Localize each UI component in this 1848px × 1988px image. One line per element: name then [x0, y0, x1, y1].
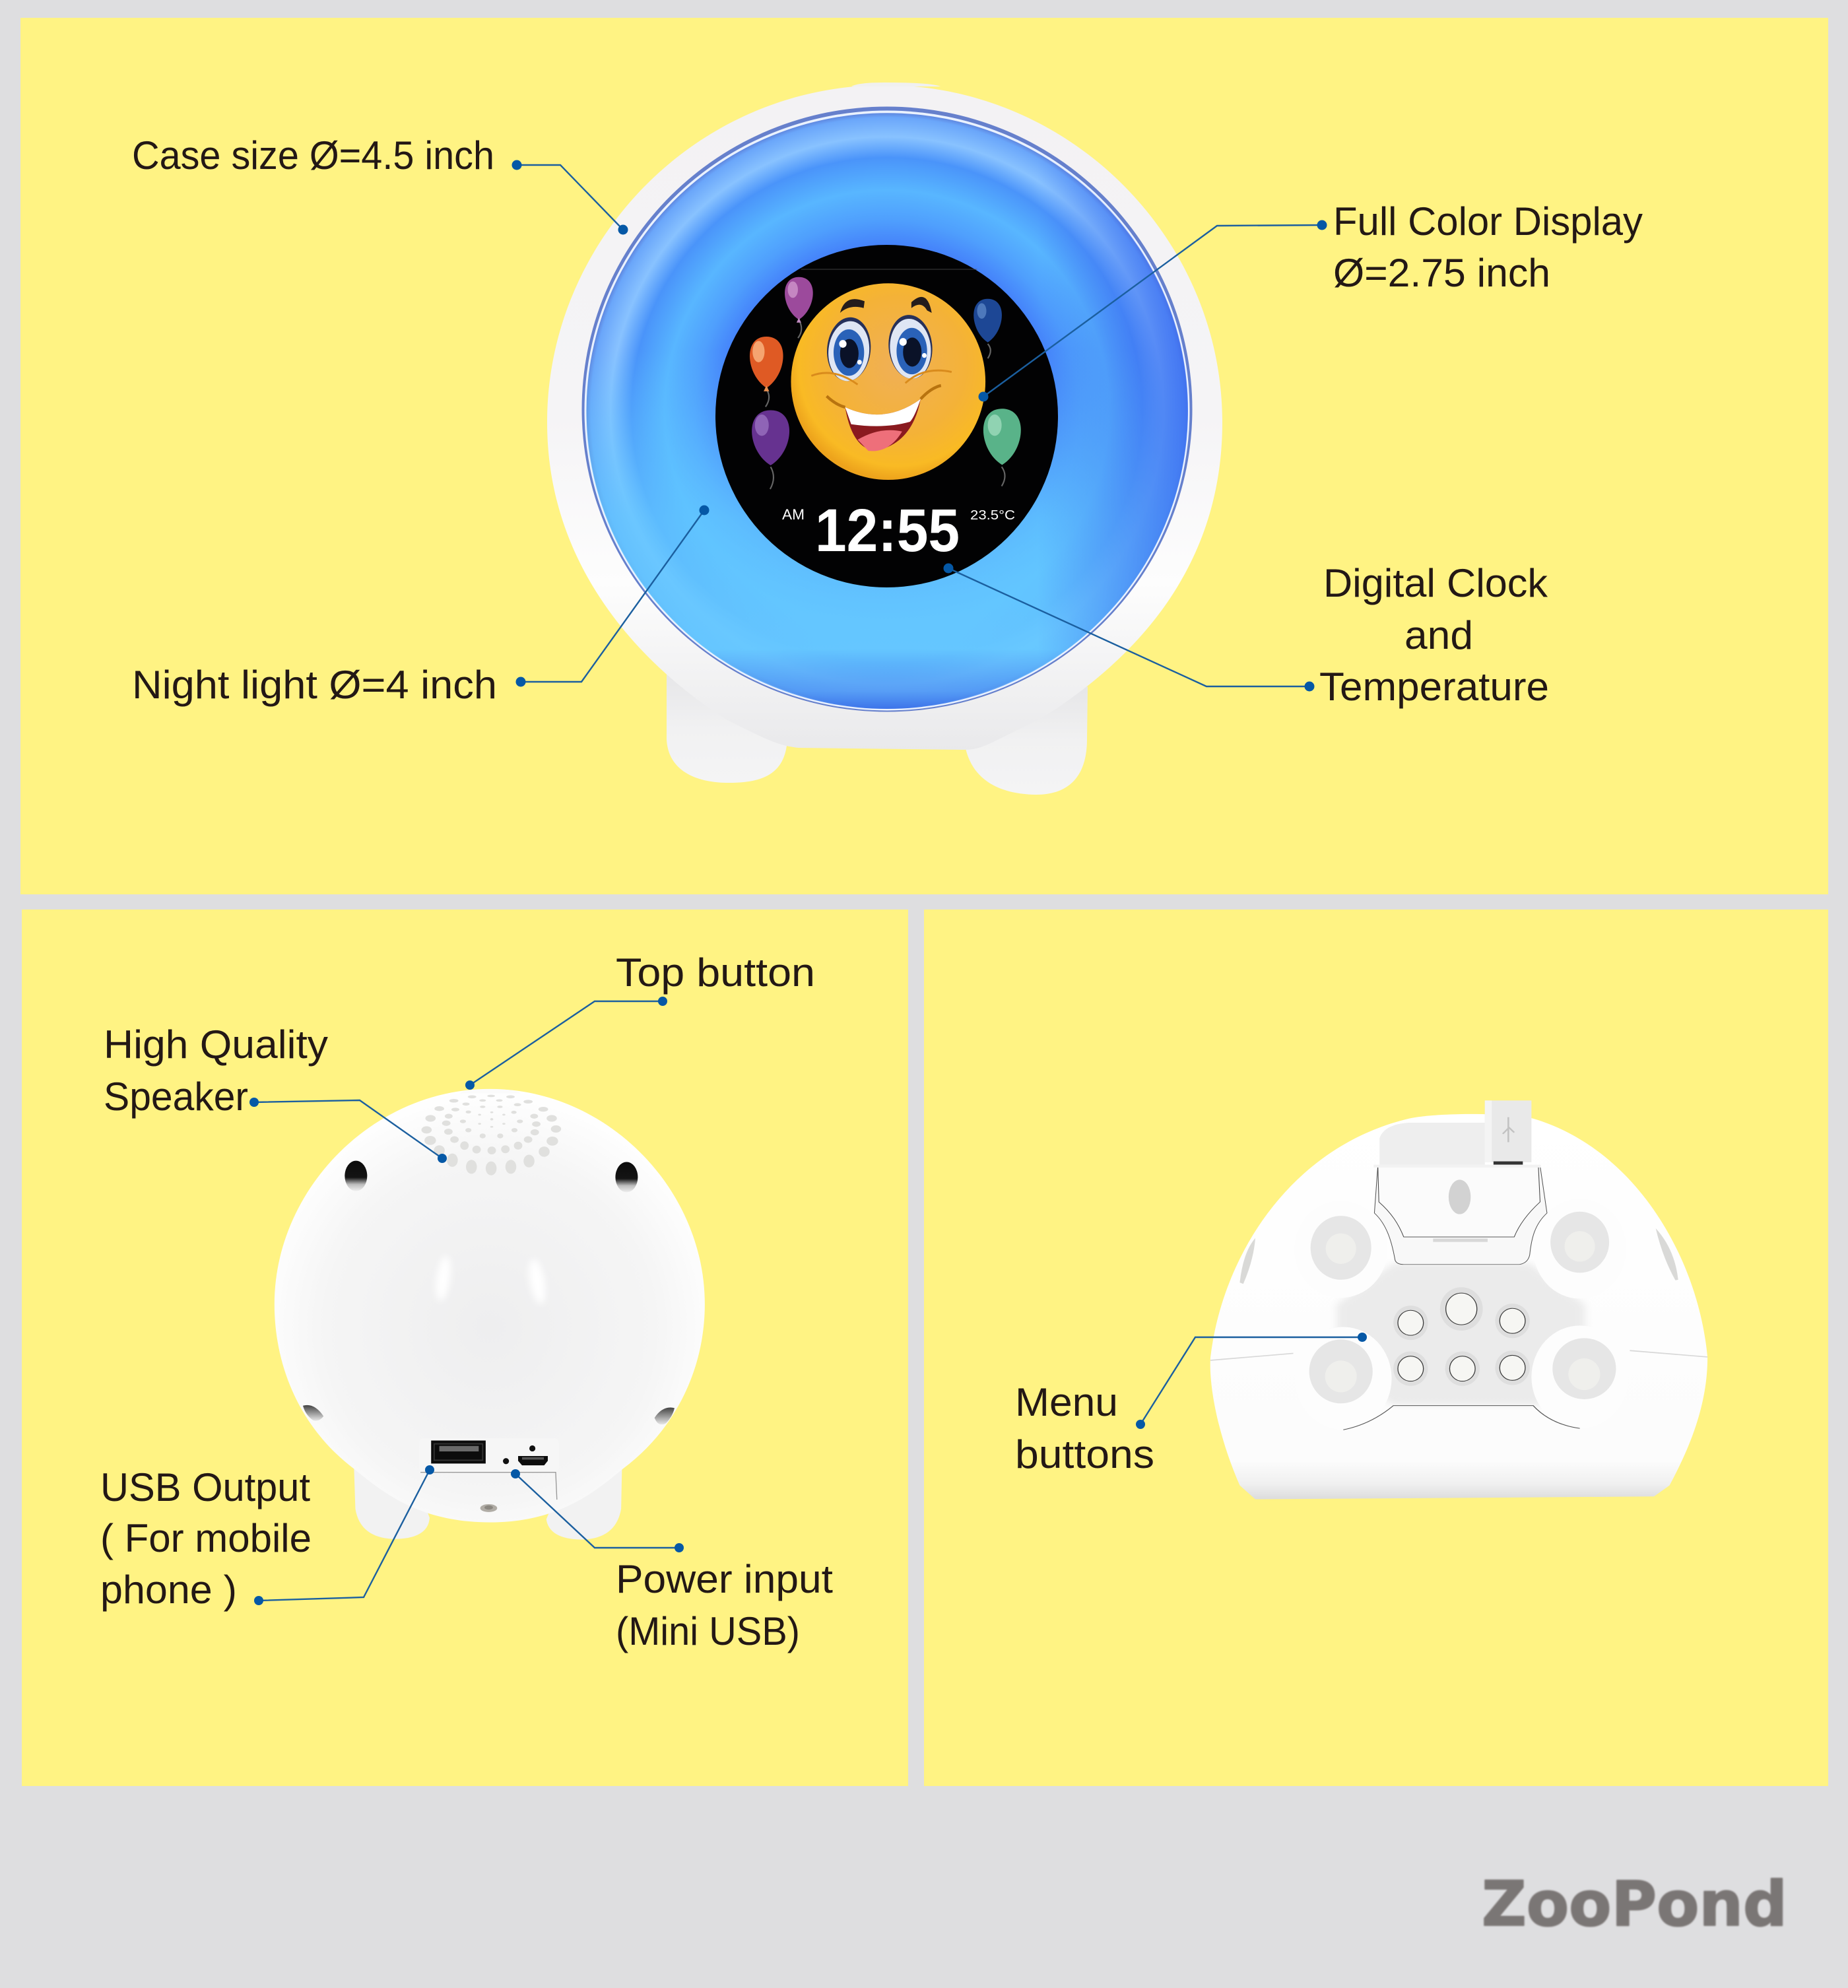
cradle block: [1379, 1123, 1485, 1166]
speaker grille: [422, 1095, 561, 1176]
left foot: [667, 673, 787, 783]
label: digital clock and temperature: Digital Clock: [1323, 561, 1548, 605]
eye left: [824, 315, 874, 383]
label: full color display: [1333, 199, 1643, 295]
ring white edge line: [585, 111, 1189, 710]
suction foot top left: [1294, 1201, 1387, 1298]
button row lower: [1393, 1350, 1530, 1386]
dome body: [1210, 1114, 1707, 1500]
label: night light: Night light Ø=4 inch: [132, 663, 497, 707]
top button bump: [460, 1089, 521, 1094]
ring right shade: [586, 112, 1188, 709]
side slots: [1239, 1228, 1678, 1284]
label: full color display: Ø=2.75 inch: [1333, 251, 1550, 295]
brand logo: ZooPond: [1482, 1869, 1787, 1940]
suction foot top right: [1533, 1199, 1626, 1299]
usb plug: [1485, 1100, 1531, 1165]
face circle: [791, 283, 985, 480]
label: high quality speaker: Speaker: [104, 1075, 248, 1119]
ring fill: [587, 113, 1187, 708]
label: menu buttons: Menu: [1015, 1380, 1118, 1424]
AM label: AM: [782, 506, 805, 523]
label: digital clock and temperature: [1319, 561, 1549, 709]
label: digital clock and temperature: and: [1404, 613, 1473, 657]
display artwork: [750, 269, 1021, 489]
eyebrow right: [911, 297, 932, 313]
panel: back view: [22, 910, 908, 1786]
balloon green: [983, 409, 1021, 486]
label: usb output: [100, 1465, 312, 1612]
label: top button: Top button: [616, 950, 815, 995]
port panel: [419, 1438, 559, 1473]
label: power input: Power input: [616, 1557, 833, 1601]
flap top edge cover: [1373, 1165, 1541, 1168]
clock back illustration: [275, 1089, 705, 1540]
label: digital clock and temperature: Temperature: [1319, 665, 1549, 709]
balloon magenta: [785, 277, 813, 338]
suction foot bottom left: [1295, 1327, 1392, 1430]
back feet: [354, 1463, 622, 1540]
lower panel seam: [1343, 1406, 1580, 1430]
flap: [1378, 1166, 1540, 1237]
seam lines: [1210, 1350, 1707, 1360]
balloon purple: [752, 410, 789, 489]
leader: usb output: [254, 1465, 434, 1605]
leader: digital clock: [944, 564, 1315, 692]
eye right: [886, 313, 935, 381]
leader: speaker: [249, 1098, 447, 1163]
top button edge: [851, 83, 940, 86]
cheeks: [811, 370, 952, 385]
balloon blue: [974, 299, 1002, 358]
clock front illustration: [547, 83, 1222, 795]
battery cover: [420, 1473, 557, 1500]
screw: [480, 1504, 497, 1512]
display top line: [801, 269, 977, 270]
leader: menu buttons: [1136, 1333, 1367, 1429]
leader: top button: [465, 997, 667, 1090]
label: usb output: phone ): [100, 1568, 237, 1612]
smiley face: [791, 283, 985, 480]
flap lower step: [1374, 1166, 1547, 1265]
display disc: [715, 245, 1058, 587]
oval hole: [1449, 1179, 1470, 1214]
mini usb port: [503, 1445, 548, 1465]
leader: night light: [516, 506, 709, 686]
panel: underside view: [924, 910, 1828, 1786]
label: power input: [616, 1557, 833, 1653]
balloon orange: [750, 337, 783, 407]
main button: [1440, 1287, 1483, 1331]
label: usb output: ( For mobile: [100, 1516, 312, 1560]
leader: case size: [512, 160, 628, 235]
time readout: 12:55: [815, 497, 960, 564]
temperature readout: 23.5°C: [970, 508, 1015, 523]
clock shell: [547, 85, 1222, 750]
button row upper: [1393, 1304, 1530, 1340]
ring bottom glow: [586, 112, 1188, 709]
label: high quality speaker: High Quality: [104, 1022, 328, 1067]
panel: front view: [20, 18, 1828, 894]
lower mount holes: [303, 1405, 675, 1424]
label: case size: Case size Ø=4.5 inch: [132, 133, 494, 178]
back highlights: [434, 1255, 548, 1305]
mouth: [826, 385, 941, 451]
button panel: [1336, 1263, 1585, 1405]
right foot: [964, 686, 1088, 795]
clock underside illustration: [1210, 1100, 1707, 1500]
blue night light ring: [582, 107, 1192, 712]
label: full color display: Full Color Display: [1333, 199, 1643, 244]
suction foot bottom right: [1531, 1325, 1628, 1428]
leader: power input: [511, 1469, 684, 1552]
label: usb output: USB Output: [100, 1465, 310, 1509]
eyebrow left: [840, 299, 865, 313]
label: menu buttons: [1015, 1380, 1154, 1476]
back body: [275, 1089, 705, 1523]
flap slot: [1433, 1239, 1488, 1242]
upper mount holes: [345, 1161, 638, 1192]
label: high quality speaker: [104, 1022, 328, 1119]
menu buttons: [1393, 1287, 1530, 1386]
usb output port: [431, 1441, 486, 1463]
label: menu buttons: buttons: [1015, 1432, 1154, 1476]
leader: full color display: [978, 220, 1327, 401]
label: power input: (Mini USB): [616, 1609, 800, 1653]
ring rim: [582, 107, 1192, 712]
